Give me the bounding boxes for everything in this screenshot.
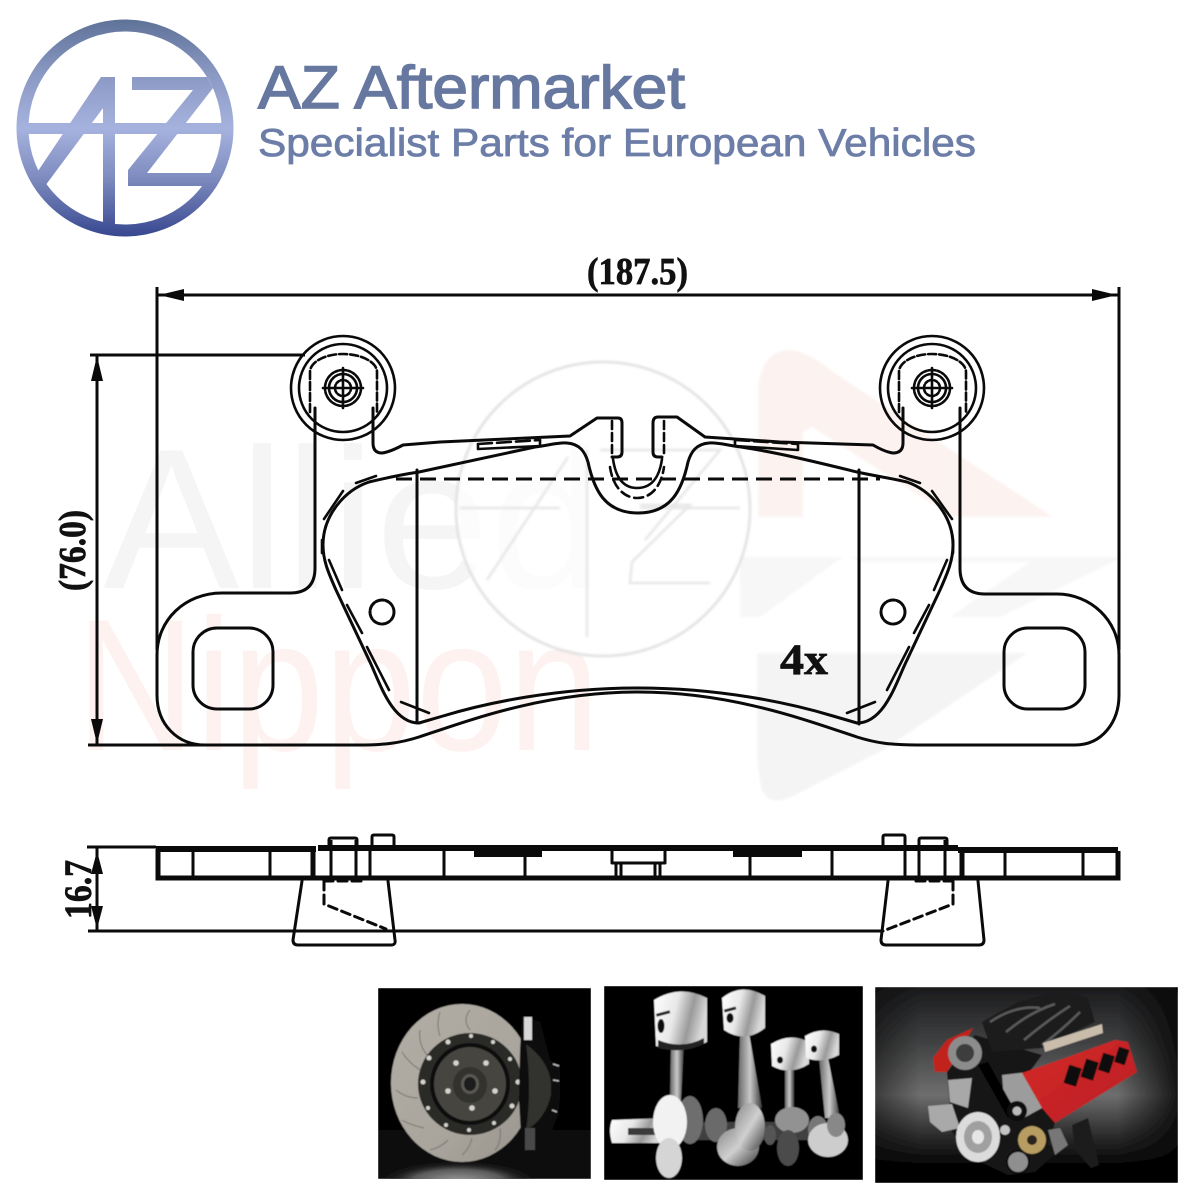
watermark: Allied text: Allied xyxy=(103,408,603,631)
side view drawing xyxy=(87,835,1118,945)
dimension: height 76.0 xyxy=(52,354,305,745)
left slot xyxy=(193,628,273,709)
logo: AZ roundel xyxy=(20,26,230,237)
watermark: arrow shapes xyxy=(740,350,1123,800)
brake pad top edge and centre clip xyxy=(373,413,903,498)
left mounting ear with bolt xyxy=(291,336,395,440)
left small hole xyxy=(370,600,394,624)
heading: company name: AZ Aftermarket xyxy=(258,54,685,121)
dimension: height 76.0: (76.0) xyxy=(52,510,94,591)
pad dashed wear line and vertical edges xyxy=(322,470,953,724)
photo: brake disc and caliper xyxy=(378,988,591,1200)
watermark: Nippon text: Nippon xyxy=(76,580,600,790)
brake pad friction material outline xyxy=(323,443,953,723)
dimension: width 187.5: (187.5) xyxy=(587,251,688,293)
right small hole xyxy=(881,600,905,624)
dimension: width 187.5 xyxy=(157,251,1119,650)
watermark: AZ circle xyxy=(456,362,750,656)
quantity label 4x: 4x xyxy=(780,637,829,684)
subheading: tagline: Specialist Parts for European Vehicles xyxy=(258,122,976,165)
dimension: thickness 16.7: 16.7 xyxy=(57,860,100,919)
right mounting ear with bolt xyxy=(880,336,984,440)
brake pad backing plate outline xyxy=(157,412,1119,745)
photo: pistons and crankshaft xyxy=(604,986,863,1180)
right slot xyxy=(1004,628,1085,709)
photo: engine xyxy=(875,987,1178,1183)
